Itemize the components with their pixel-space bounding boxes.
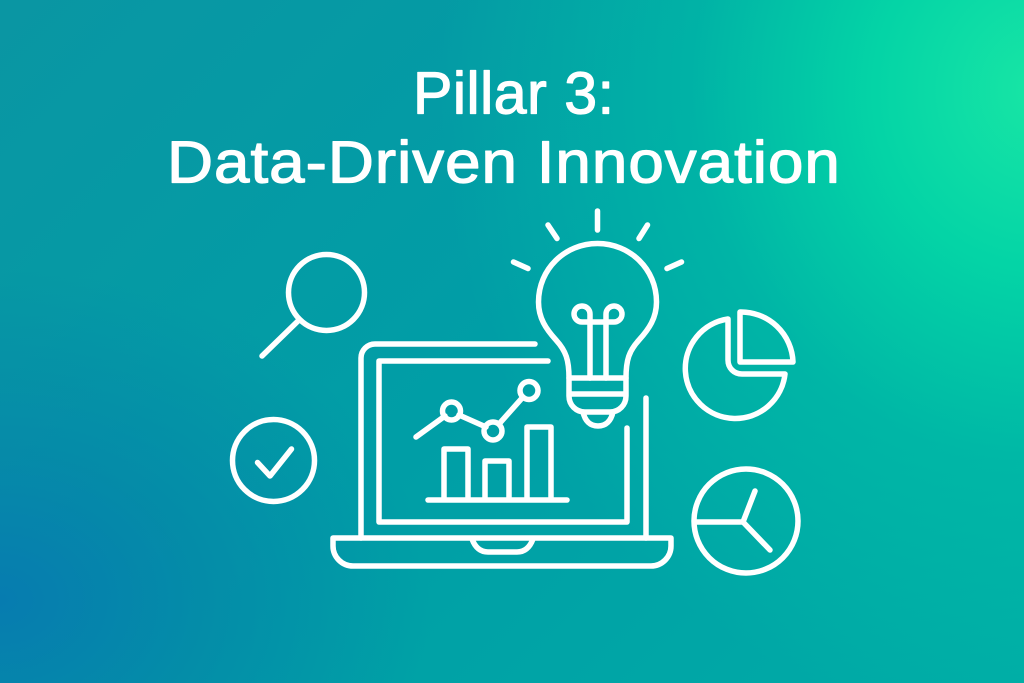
filament <box>574 306 622 378</box>
bulb rays <box>514 211 682 268</box>
icon: light bulb <box>514 211 682 426</box>
icon: pie chart <box>685 312 793 418</box>
bulb base <box>569 378 626 426</box>
title: Data-Driven Innovation <box>167 130 840 196</box>
bulb glass <box>538 244 656 378</box>
bar chart <box>428 427 567 500</box>
laptop base <box>333 538 671 566</box>
title: Pillar 3: <box>413 60 614 126</box>
icon: check mark circle <box>232 420 314 502</box>
icon: clock diagram <box>694 469 798 573</box>
icon: magnifying glass <box>262 254 364 356</box>
line chart <box>416 382 538 440</box>
laptop frame <box>361 344 646 538</box>
icon: laptop with charts <box>333 344 671 566</box>
title <box>167 60 840 196</box>
laptop screen <box>379 361 627 522</box>
